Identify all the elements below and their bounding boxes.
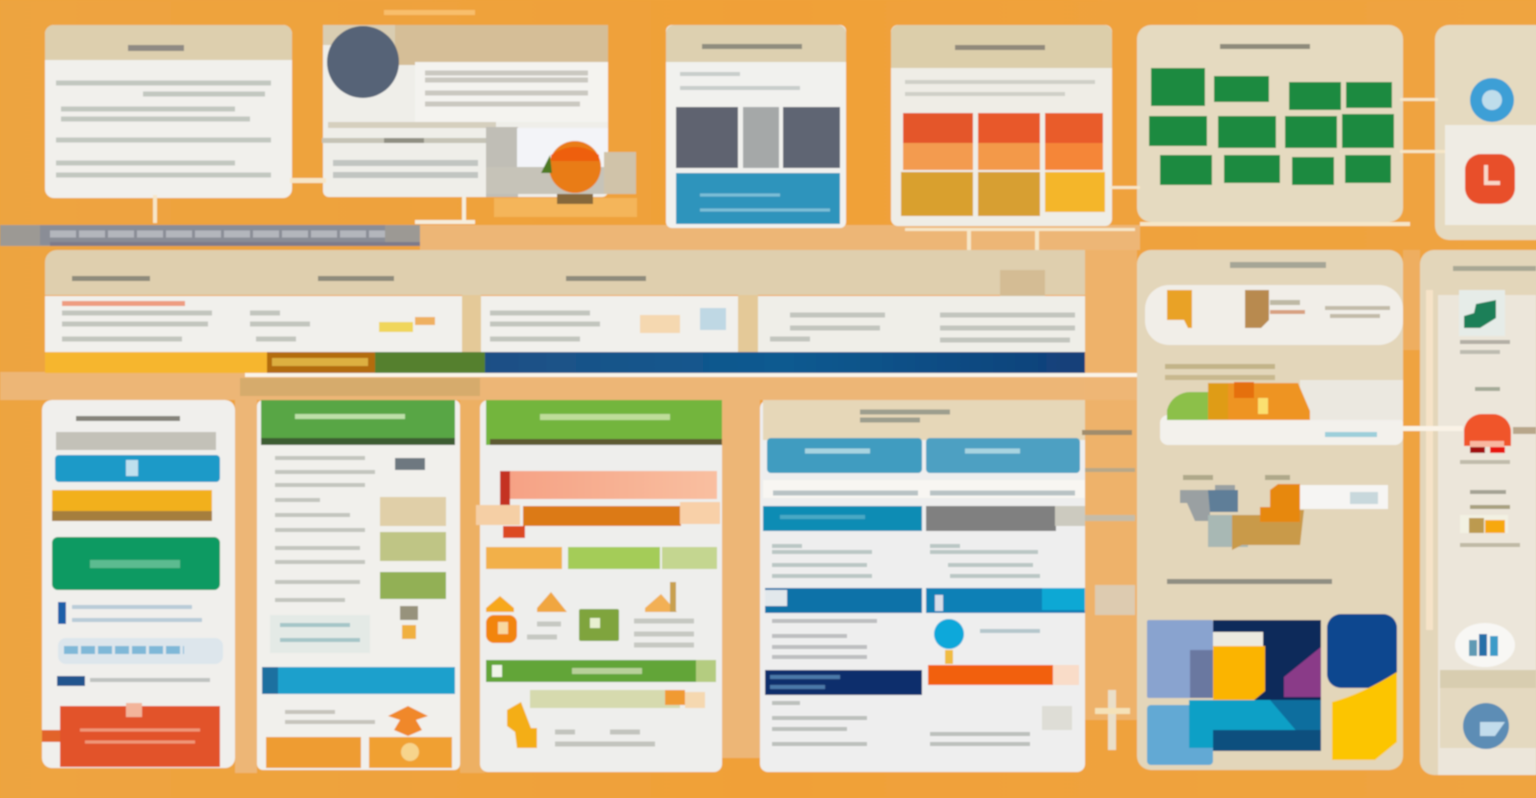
- gaps between white sections: [462, 295, 758, 352]
- panel: bottom C: [476, 400, 722, 772]
- panel: top 2: [322, 25, 636, 197]
- orange matrix: [901, 113, 1105, 216]
- side swatches: [380, 458, 446, 639]
- orange bar: [523, 506, 681, 526]
- white pill: [1145, 285, 1403, 345]
- salmon bar: [506, 471, 717, 499]
- blue bar left: [765, 588, 922, 613]
- red block: [60, 706, 220, 767]
- navy bar: [765, 670, 922, 695]
- grey block: [486, 127, 635, 197]
- blue block: [676, 173, 840, 224]
- blue bar right: [926, 588, 1085, 613]
- food chart: [1160, 364, 1403, 445]
- icon: small tile: [1460, 515, 1508, 533]
- panel: bottom right E: [1137, 250, 1403, 770]
- panel: top 4: [891, 25, 1112, 226]
- green blocks: [1149, 68, 1394, 185]
- connector band: [0, 225, 1420, 773]
- colour blocks: [1147, 614, 1397, 765]
- icon: blue circle: [1470, 78, 1514, 122]
- white box: [517, 128, 608, 167]
- panel: top 6: [1435, 25, 1536, 240]
- middle band: [45, 250, 1085, 352]
- icon: globe: [1463, 703, 1509, 749]
- panel: top 5: [1137, 25, 1403, 222]
- icon: orange fruit: [415, 141, 637, 224]
- orange bar: [928, 665, 1053, 685]
- icon: red badge: [1464, 414, 1511, 453]
- connector: [1403, 426, 1463, 431]
- grey title bar: [0, 225, 420, 246]
- small icons: [486, 582, 677, 643]
- side notes: [1082, 430, 1135, 750]
- icon: green chart: [1459, 290, 1505, 336]
- panel: top 1: [45, 25, 292, 198]
- icon: red badge: [1465, 154, 1515, 204]
- blue headers: [767, 438, 1080, 473]
- connectors: [153, 98, 1445, 250]
- icon: bar chart: [1455, 623, 1515, 667]
- icon: dark circle: [327, 26, 399, 98]
- green bar: [486, 660, 716, 682]
- grey blocks: [676, 107, 840, 168]
- blob chart: [1180, 475, 1388, 550]
- icon: blue pin: [934, 619, 964, 649]
- panel: bottom B: [257, 400, 460, 770]
- callout pill: [530, 690, 680, 708]
- panel: bottom D: [760, 400, 1085, 772]
- colour strip: [45, 352, 1137, 396]
- tag row: [486, 547, 562, 569]
- panel: bottom A: [42, 400, 235, 768]
- header labels: [72, 276, 646, 281]
- panel: top 3: [666, 25, 846, 228]
- panel: bottom right F: [1403, 250, 1536, 775]
- top accent bar: [384, 10, 475, 15]
